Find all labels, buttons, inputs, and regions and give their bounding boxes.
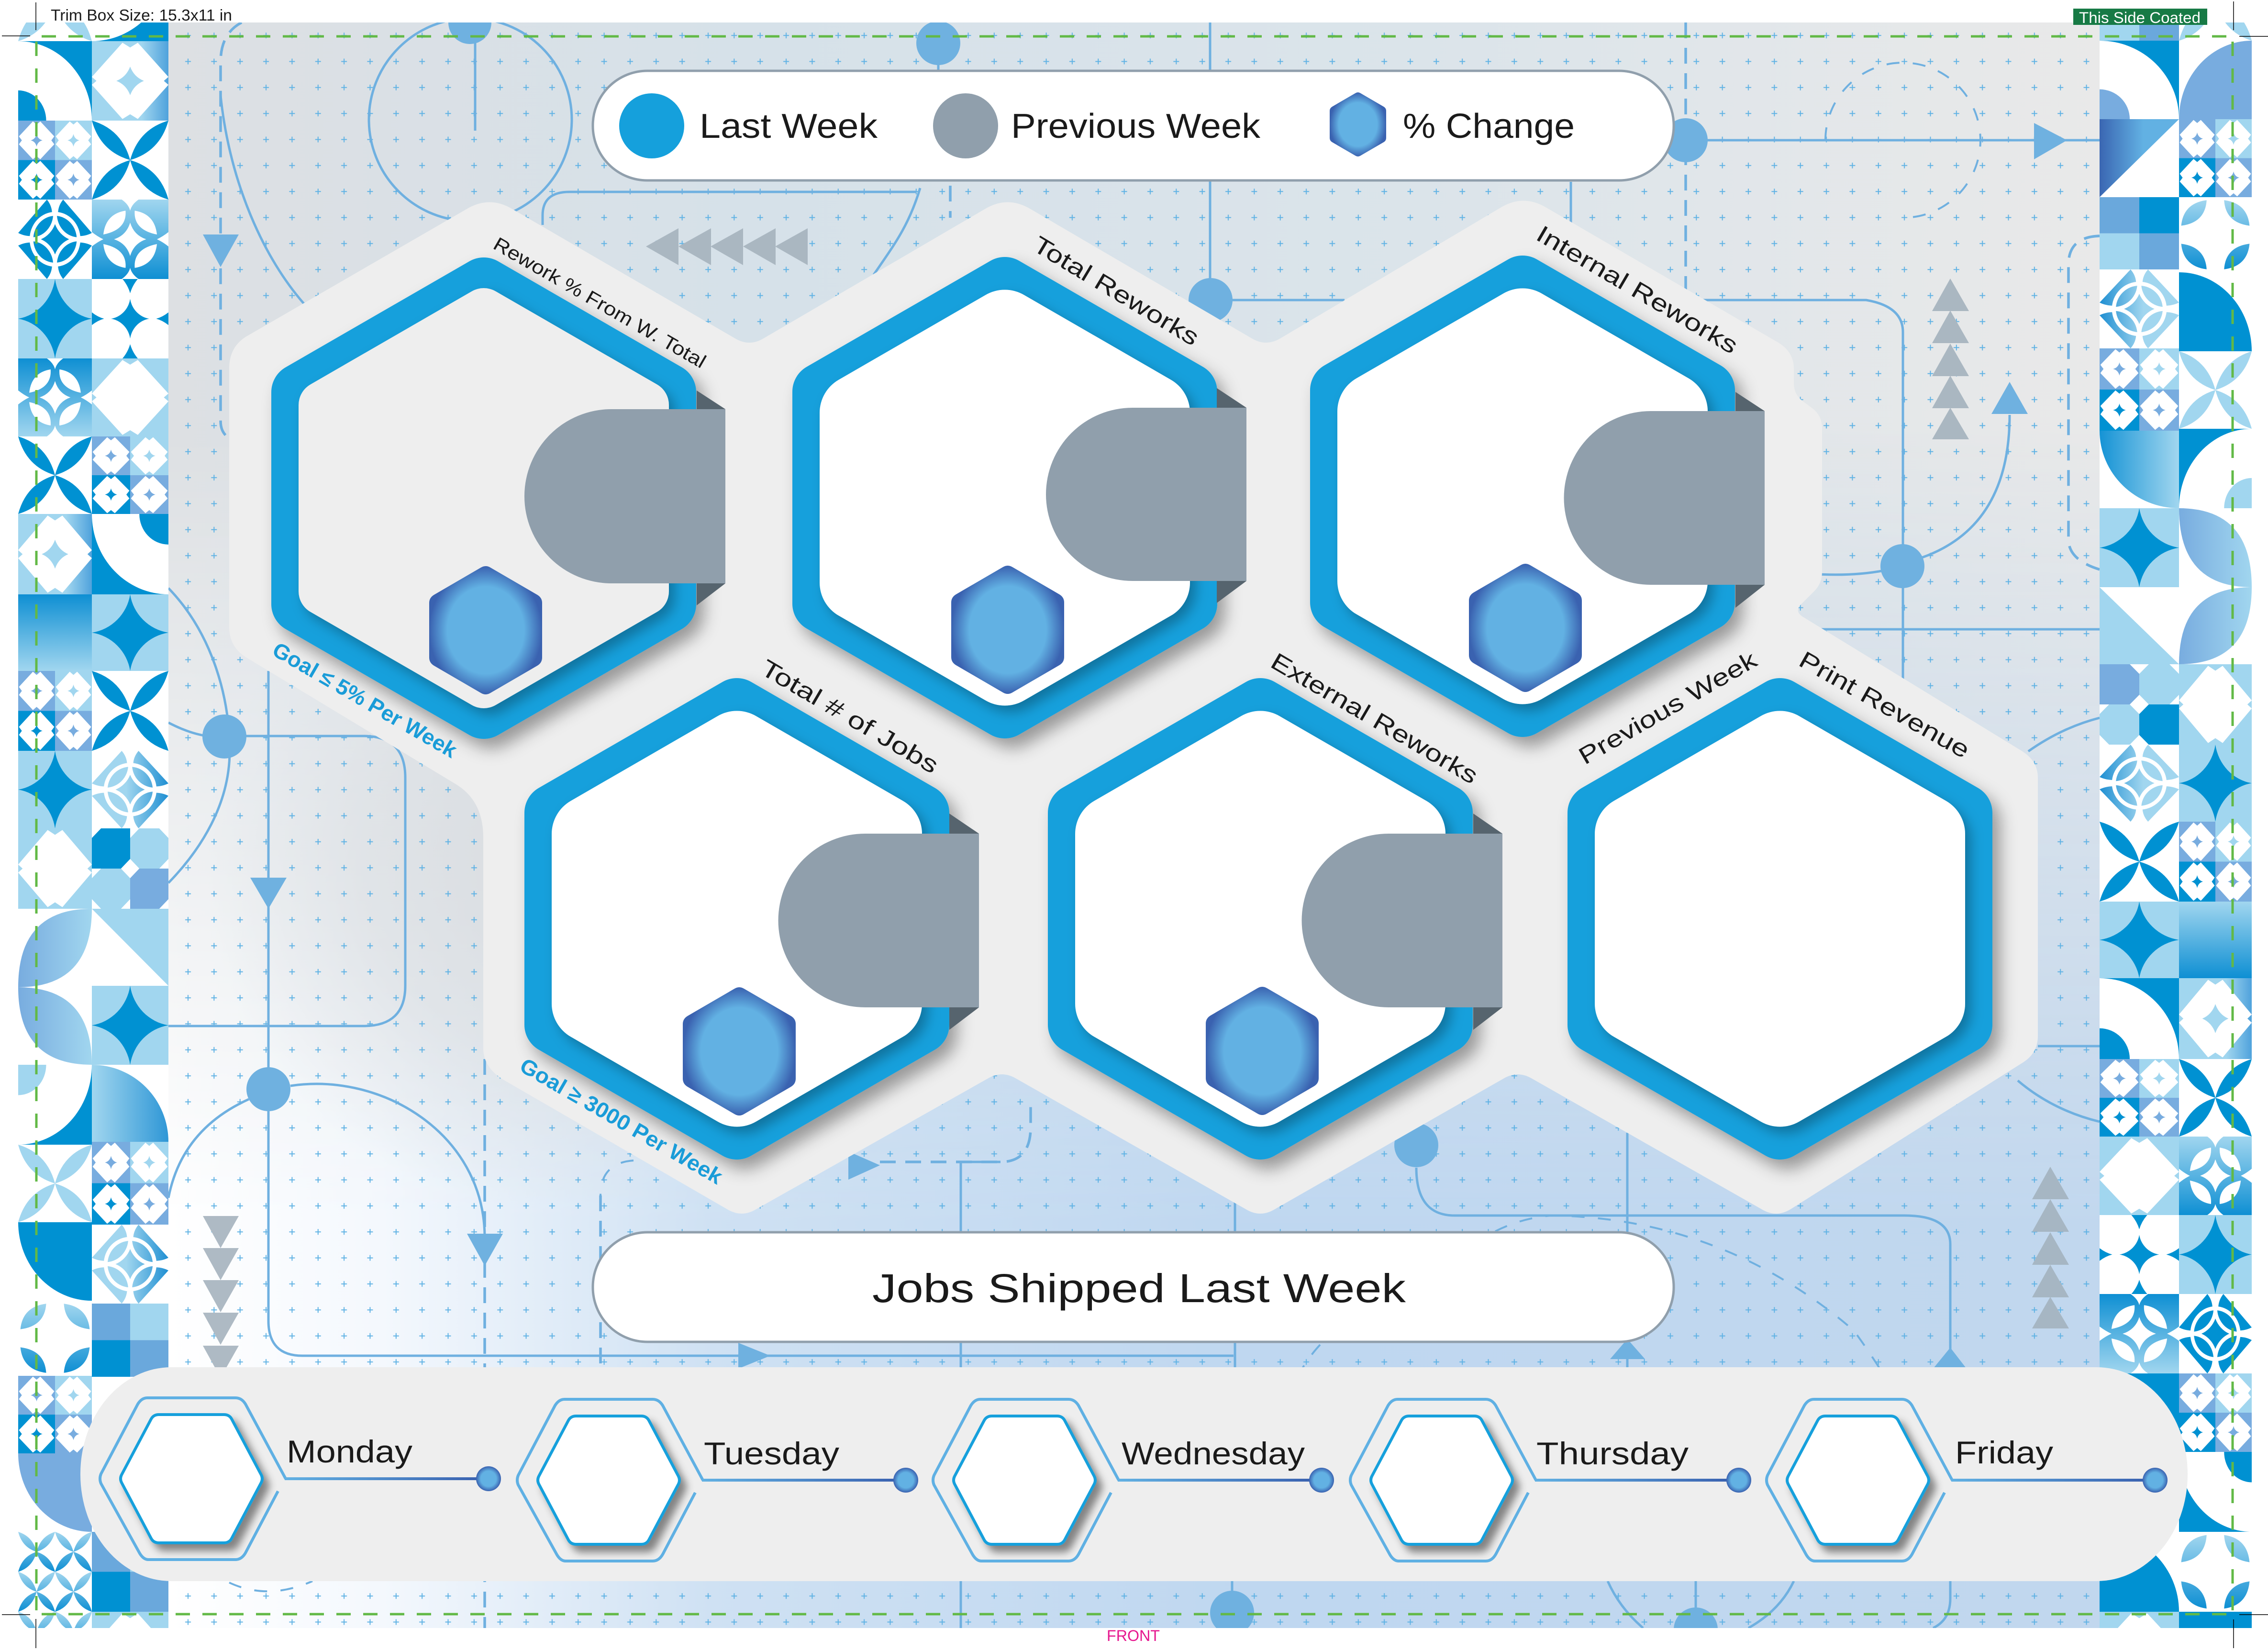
- percent change badge: [683, 987, 796, 1116]
- grey arrows pointing down, bottom left: [203, 1216, 239, 1378]
- text: trim box size: Trim Box Size: 15.3x11 in: [51, 6, 232, 24]
- text: front: FRONT: [1107, 1627, 1160, 1644]
- previous week tab: [1046, 408, 1246, 581]
- label: goal rework: Goal ≤ 5% Per Week: [268, 637, 462, 763]
- legend: percent change: [1330, 92, 1575, 156]
- grey arrows pointing left: [646, 228, 808, 265]
- grey arrows pointing up, top right: [1932, 279, 1969, 439]
- day: Monday: Monday: [287, 1434, 412, 1469]
- badge: this side coated: This Side Coated: [2079, 9, 2201, 26]
- legend: last week: Last Week: [700, 107, 878, 145]
- label: Previous Week: Previous Week: [1574, 646, 1762, 770]
- day: Friday: [1767, 1399, 2168, 1561]
- label: Total Reworks: Total Reworks: [1028, 231, 1204, 351]
- percent change badge: [1206, 987, 1319, 1115]
- percent change badge: [429, 566, 542, 694]
- day: Friday: Friday: [1955, 1435, 2053, 1470]
- legend: previous week: [933, 93, 1261, 158]
- label: Rework % From W. Total: Rework % From W. Total: [490, 234, 710, 372]
- percent change badge: [1469, 564, 1582, 692]
- legend: previous week: Previous Week: [1011, 107, 1261, 145]
- label: Internal Reworks: Internal Reworks: [1532, 220, 1743, 359]
- panel: daily bar: [80, 1367, 2188, 1581]
- day: Thursday: Thursday: [1536, 1436, 1689, 1471]
- day: Tuesday: Tuesday: [704, 1436, 839, 1471]
- previous week tab: [778, 834, 979, 1007]
- panel: Total # of Jobs hexagon: [553, 707, 979, 1131]
- panel: light grey hexagon cluster: [229, 201, 2038, 1214]
- panel: Total Reworks hexagon: [821, 286, 1246, 710]
- previous week tab: [1564, 411, 1765, 585]
- day: Thursday: [1350, 1399, 1751, 1561]
- day: Wednesday: Wednesday: [1122, 1436, 1305, 1471]
- legend: percent change: % Change: [1403, 107, 1575, 145]
- panel: Internal Reworks hexagon: [1339, 284, 1765, 708]
- heading: Jobs Shipped Last Week: [872, 1266, 1406, 1311]
- label: Print Revenue: Print Revenue: [1795, 646, 1974, 764]
- percent change badge: [951, 566, 1064, 694]
- panel: External Reworks hexagon: [1077, 707, 1502, 1131]
- panel: left pattern strip: [18, 0, 168, 1651]
- panel: Jobs Shipped Last Week pill: [593, 1232, 1674, 1342]
- panel: right pattern strip: [2100, 0, 2252, 1651]
- previous week tab: [524, 409, 725, 583]
- day: Tuesday: [517, 1399, 918, 1561]
- grey arrows pointing up, bottom right: [2032, 1167, 2069, 1328]
- panel: Rework % hexagon: [300, 286, 725, 710]
- label: Total # of Jobs: Total # of Jobs: [756, 654, 943, 779]
- day: Monday: [100, 1398, 501, 1560]
- legend: last week: [619, 93, 878, 158]
- day: Wednesday: [933, 1399, 1334, 1561]
- label: goal jobs: Goal ≥ 3000 Per Week: [516, 1053, 727, 1189]
- panel: Print Revenue hexagon: [1596, 707, 1964, 1131]
- previous week tab: [1301, 834, 1502, 1007]
- panel: legend pill: [593, 71, 1674, 180]
- label: External Reworks: External Reworks: [1266, 647, 1483, 789]
